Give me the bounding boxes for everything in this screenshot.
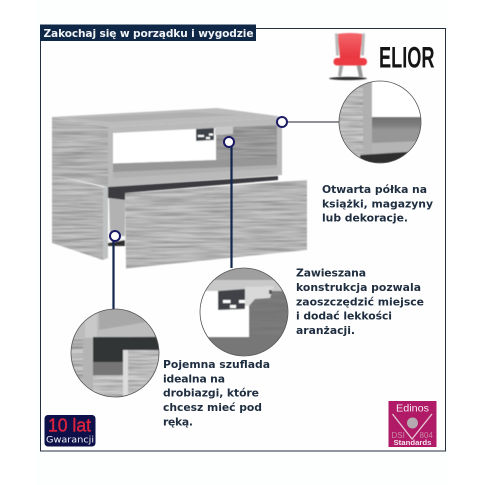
connector line — [282, 121, 340, 123]
drawer interior — [108, 176, 278, 200]
top surface — [52, 108, 282, 127]
frame — [40, 28, 446, 451]
text block: hanging construction: zaoszczędzić miejsce — [296, 295, 424, 308]
text block: open shelf — [322, 183, 433, 224]
marker dot — [277, 117, 287, 127]
heading banner: Zakochaj się w porządku i wygodzie — [44, 28, 254, 40]
shelf front frame — [108, 118, 282, 187]
text block: open shelf: książki, magazyny — [322, 197, 433, 210]
text block: open shelf: Otwarta półka na — [322, 183, 427, 196]
badge: 10 year warranty: Gwarancji — [46, 436, 94, 446]
shelf back wood — [216, 125, 277, 162]
shelf floor — [113, 158, 277, 178]
badge: Edinos standards: 804 — [420, 431, 433, 440]
badge: Edinos standards: Edinos — [396, 402, 429, 414]
text block: drawer: drobiazgi, które — [163, 387, 259, 400]
furniture photo: wall-mounted cabinet with drawer — [52, 108, 307, 268]
connector line — [230, 147, 233, 268]
badge: Edinos standards: Standards — [394, 438, 432, 447]
marker dot — [110, 231, 120, 241]
badge: Edinos standards: DSI — [392, 431, 405, 440]
text block: drawer: chcesz mieć pod — [163, 401, 262, 414]
logo: Elior — [329, 33, 435, 80]
wall bracket — [196, 126, 233, 141]
connector line — [112, 240, 115, 311]
callout: drawer — [71, 231, 159, 398]
magnified circle: open drawer — [71, 309, 159, 398]
text block: drawer: idealna na — [163, 372, 225, 385]
shelf opening white — [113, 128, 216, 164]
badge: Edinos standards — [388, 401, 436, 447]
badge: 10 year warranty: 10 lat — [48, 416, 91, 436]
text block: drawer: Pojemna szuflada — [163, 358, 270, 371]
brand name: ELIOR — [379, 42, 435, 74]
icon: red chair — [329, 33, 367, 80]
drawer front — [125, 180, 307, 268]
text block: hanging construction: aranżacji. — [296, 324, 355, 337]
text block: hanging construction: i dodać lekkości — [296, 310, 392, 323]
text block: open shelf: lub dekoracje. — [322, 212, 408, 224]
text block: hanging construction: Zawieszana — [296, 267, 366, 280]
magnified circle: hanging bracket — [200, 268, 288, 356]
side panel lower — [52, 175, 103, 260]
magnified circle: shelf corner — [339, 81, 421, 163]
marker dot — [224, 137, 234, 147]
text block: drawer: ręką. — [163, 415, 193, 428]
side panel upper — [52, 117, 108, 187]
text block: hanging construction — [296, 267, 424, 337]
text block: drawer — [163, 358, 270, 428]
callout: shelf — [277, 81, 421, 163]
text block: hanging construction: konstrukcja pozwala — [296, 281, 421, 294]
infographic canvas — [40, 24, 446, 452]
badge: 10 year warranty — [44, 415, 96, 446]
callout: bracket — [200, 137, 288, 356]
